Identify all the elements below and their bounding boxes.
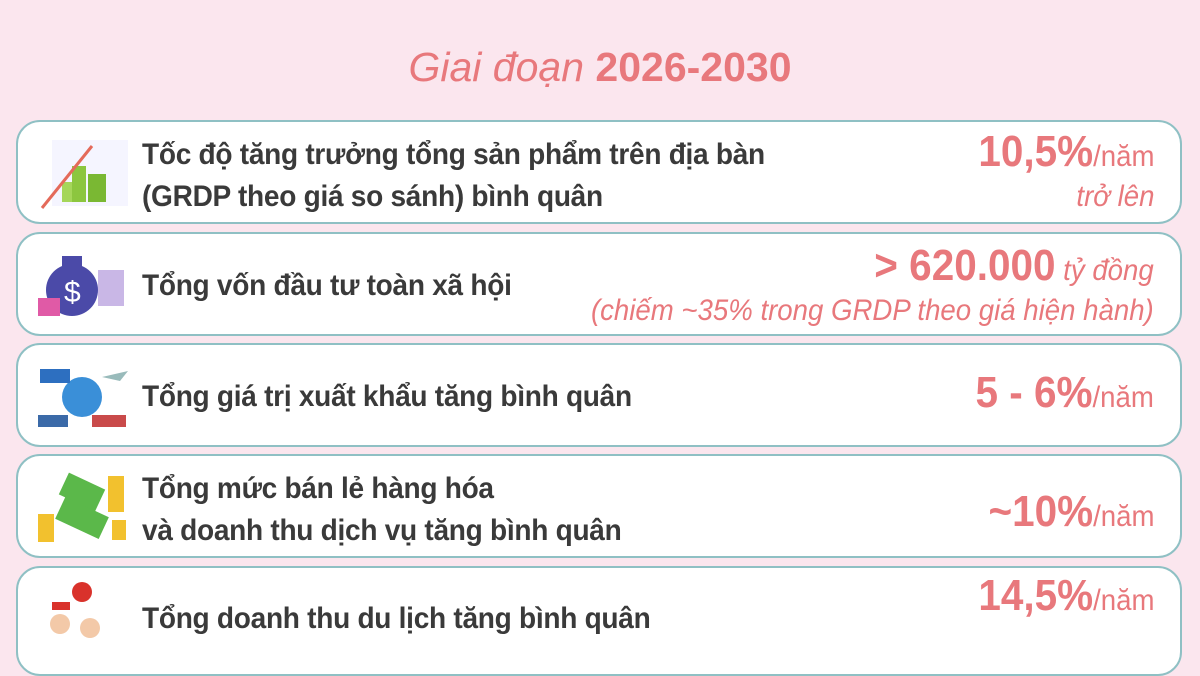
icon: money and coins <box>38 472 126 542</box>
value <box>591 241 1154 327</box>
panel: tourism <box>16 566 1182 676</box>
value: ~10%/năm <box>988 487 1154 536</box>
label <box>142 472 621 547</box>
icon: growth chart <box>40 140 128 209</box>
value: 10,5%/năm <box>978 127 1154 176</box>
value: > 620.000 tỷ đồng <box>875 241 1154 290</box>
icon: tourists <box>50 582 100 638</box>
panel: investment <box>16 232 1182 336</box>
panel: GRDP <box>16 120 1182 224</box>
icon: globe logistics <box>38 369 128 427</box>
panel: export <box>16 343 1182 447</box>
value: 14,5%/năm <box>978 571 1154 620</box>
panel: retail <box>16 454 1182 558</box>
label <box>142 138 765 213</box>
value: (chiếm ~35% trong GRDP theo giá hiện hành) <box>591 294 1154 327</box>
icon: money bag <box>38 256 124 316</box>
value: trở lên <box>1076 180 1154 213</box>
value: 5 - 6%/năm <box>976 368 1154 417</box>
icon: money bag: $ <box>64 276 81 309</box>
label: Tổng mức bán lẻ hàng hóa <box>142 472 494 505</box>
label: Tốc độ tăng trưởng tổng sản phẩm trên địa bàn <box>142 138 765 171</box>
label: Tổng vốn đầu tư toàn xã hội <box>142 269 512 302</box>
label: Tổng doanh thu du lịch tăng bình quân <box>142 602 650 635</box>
label: Tổng giá trị xuất khẩu tăng bình quân <box>142 380 632 413</box>
value <box>978 127 1154 213</box>
title: Giai đoạn 2026-2030 <box>408 44 792 90</box>
label: và doanh thu dịch vụ tăng bình quân <box>142 514 621 547</box>
label: (GRDP theo giá so sánh) bình quân <box>142 180 603 213</box>
